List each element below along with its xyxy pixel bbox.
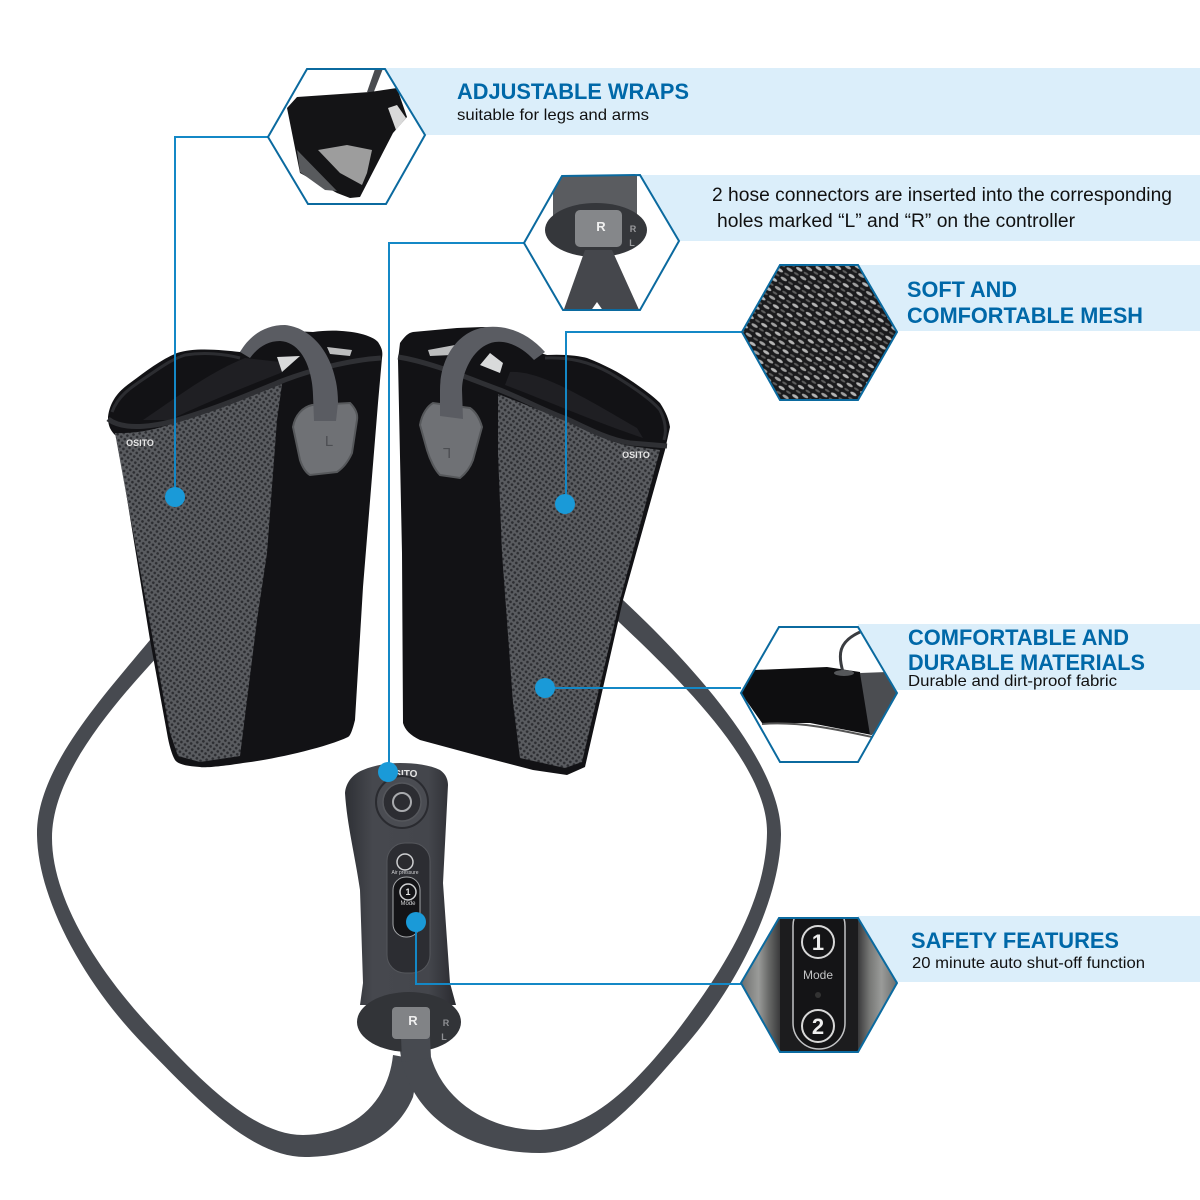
handheld controller (345, 763, 461, 1062)
banner: safety features (858, 916, 1200, 982)
banner: soft mesh (858, 265, 1200, 331)
hexagon photo: hose connector: R (596, 219, 606, 234)
front rim (398, 357, 667, 446)
brand mark: OSITO (387, 769, 418, 780)
hose plug (392, 1007, 430, 1039)
text: durable fabric: Durable and dirt-proof fabric (908, 673, 1117, 690)
heading: adjustable wraps: ADJUSTABLE WRAPS (457, 79, 689, 104)
heading: comfortable mesh: COMFORTABLE MESH (907, 303, 1143, 328)
banner: adjustable wraps (385, 68, 1200, 135)
tab letter: L (325, 433, 333, 450)
brand mark: OSITO (622, 450, 650, 460)
brand mark: OSITO (126, 438, 154, 448)
text: suitable for legs and arms: suitable for legs and arms (457, 107, 649, 124)
leader line: wraps (175, 137, 268, 497)
hexagon photo: mode buttons: 1 (812, 930, 824, 955)
inner tag (480, 353, 503, 373)
connector tab (420, 403, 482, 478)
controller base (357, 992, 461, 1052)
control panel (387, 843, 430, 973)
mode buttons (393, 877, 420, 937)
air hoses (37, 578, 781, 1157)
mode one (400, 884, 416, 900)
marker dot: safety (406, 912, 426, 932)
hexagon photo: hose connector: L (629, 238, 635, 248)
mode label: Mode (400, 901, 416, 907)
mode one digit: 1 (405, 887, 411, 897)
tab letter: L (443, 444, 451, 461)
leader line: safety (416, 922, 741, 984)
port label right: R (443, 1018, 450, 1028)
plug letter: R (408, 1013, 418, 1028)
text: auto shut-off: 20 minute auto shut-off function (912, 955, 1145, 972)
left leg wrap (108, 325, 382, 767)
hexagon photo: mode buttons: 2 (812, 1014, 824, 1039)
heading: soft and: SOFT AND (907, 277, 1017, 302)
banner: hose connectors (640, 175, 1200, 241)
text: hose connectors: 2 hose connectors are inserted into the corresponding (712, 185, 1172, 206)
hexagon photo: hose connector: R (630, 224, 637, 234)
banner: durable materials (858, 624, 1200, 690)
mesh panel (498, 394, 660, 768)
hexagon photo: hose connector (524, 170, 679, 312)
pressure label: Air pressure (392, 870, 419, 876)
front rim (108, 358, 381, 427)
heading: comfortable and: COMFORTABLE AND (908, 625, 1129, 650)
power ring (393, 793, 411, 811)
marker dot: hose connectors (378, 762, 398, 782)
back tag (428, 345, 455, 356)
hexagon photo: mode buttons (741, 900, 897, 1054)
connector tab (293, 403, 357, 475)
port label left: L (441, 1032, 447, 1042)
hose loop (240, 325, 338, 421)
marker dot: wraps (165, 487, 185, 507)
back rim (545, 358, 665, 440)
inner fold (143, 358, 283, 420)
inner fold (505, 372, 643, 438)
power disc (383, 783, 421, 821)
leader line: mesh (566, 332, 742, 504)
leader line: materials (545, 687, 741, 689)
text: hose connectors second line: holes marked “L” and “R” on the controller (717, 211, 1076, 232)
marker dot: materials (535, 678, 555, 698)
back tag (327, 347, 352, 356)
marker dot: mesh (555, 494, 575, 514)
right leg wrap (398, 327, 670, 775)
plug neck (401, 1036, 431, 1062)
leader line: hose connectors (389, 243, 524, 772)
mesh panel (115, 384, 282, 762)
hexagon photo: wrap interior (268, 66, 425, 204)
hose loop (440, 327, 545, 419)
power button (376, 776, 428, 828)
hexagon photo: materials (741, 627, 898, 762)
pressure button (397, 854, 413, 870)
inner tag (277, 356, 300, 372)
hexagon photo: mode buttons: Mode (803, 968, 833, 982)
hexagon photo: mesh fabric (742, 265, 897, 400)
back rim (112, 354, 240, 412)
heading: safety features: SAFETY FEATURES (911, 928, 1119, 953)
heading: durable materials: DURABLE MATERIALS (908, 650, 1145, 675)
